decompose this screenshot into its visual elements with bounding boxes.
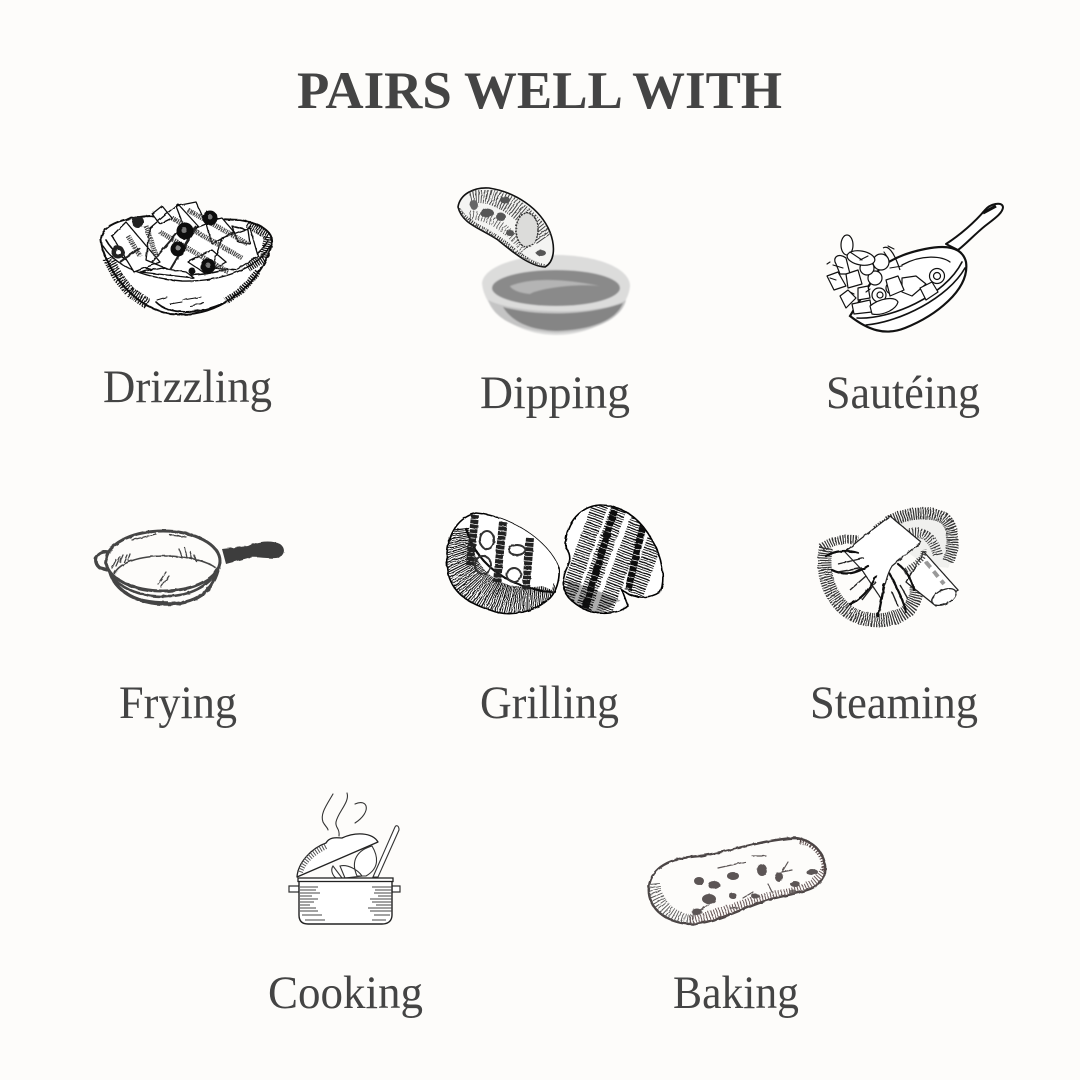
item: grilling — [447, 505, 663, 729]
label: baking: Baking — [673, 967, 799, 1019]
item: sauteing — [826, 204, 1003, 419]
item: steaming — [810, 510, 978, 729]
icon: frying pan — [96, 531, 284, 604]
icon: grilled bread and mushroom — [447, 505, 663, 620]
label: frying: Frying — [119, 677, 237, 729]
label: drizzling: Drizzling — [103, 361, 272, 413]
title: PAIRS WELL WITH — [297, 62, 782, 120]
icon: salad bowl — [101, 202, 272, 314]
label: grilling: Grilling — [480, 677, 619, 729]
icon: focaccia bread — [649, 838, 826, 924]
item: dipping — [458, 188, 630, 419]
icon: saute pan with vegetables — [827, 204, 1003, 332]
label: steaming: Steaming — [810, 677, 978, 729]
label: sauteing: Sautéing — [826, 367, 980, 419]
label: dipping: Dipping — [480, 367, 630, 419]
item: drizzling — [101, 202, 272, 413]
infographic canvas — [94, 72, 1004, 1018]
icon: broccoli — [818, 510, 959, 625]
icon: bread over dipping bowl — [458, 188, 630, 335]
label: cooking: Cooking — [268, 967, 423, 1019]
item: baking — [649, 838, 826, 1019]
icon: pot with lid and steam — [289, 793, 400, 924]
item: cooking — [268, 793, 423, 1019]
item: frying — [96, 531, 284, 729]
